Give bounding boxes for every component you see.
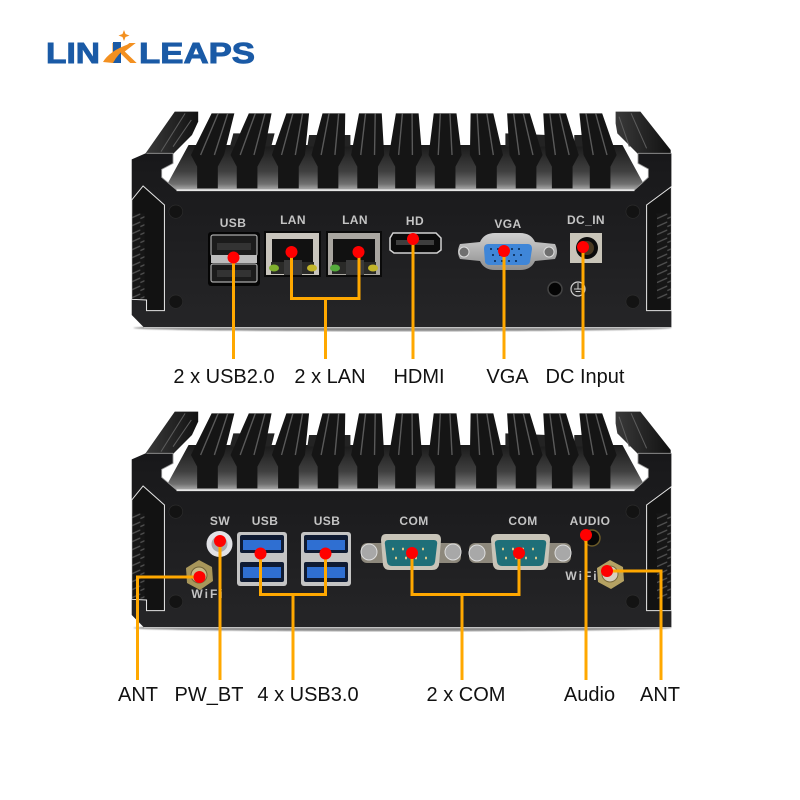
captions: rear ports xyxy=(118,684,680,706)
captions: rear ports: ANT xyxy=(640,684,680,706)
line: VGA xyxy=(502,251,506,359)
port: left antenna xyxy=(186,560,213,590)
line: USB3.0 bracket xyxy=(260,553,326,680)
captions: front ports: VGA xyxy=(486,366,529,388)
port: USB 3.0 stack 2 xyxy=(301,532,351,586)
silk labels, front: LAN xyxy=(280,213,306,227)
logo: LINKLEAPS: LEAPS xyxy=(139,38,255,70)
line: power button xyxy=(218,541,222,680)
captions: rear ports: PW_BT xyxy=(175,684,243,706)
port: LAN 1 xyxy=(264,231,321,277)
line: audio xyxy=(584,535,588,680)
device enclosure, front xyxy=(132,112,671,331)
silk labels, front: DC_IN xyxy=(567,213,605,227)
red markers, rear xyxy=(194,529,613,583)
line: COM bracket xyxy=(412,553,519,680)
port: power button xyxy=(206,531,232,557)
silk labels, rear: SW xyxy=(210,514,230,528)
port: DC input xyxy=(570,233,602,263)
device enclosure, rear xyxy=(132,412,671,631)
silk labels, front: HD xyxy=(406,214,424,228)
captions: rear ports: 2 x COM xyxy=(427,684,505,706)
line: HDMI xyxy=(412,239,414,359)
line: DC input xyxy=(582,247,584,359)
captions: front ports: 2 x LAN xyxy=(294,366,366,388)
red markers, front xyxy=(228,233,589,264)
silk labels, rear: COM xyxy=(399,514,429,528)
callout lines and dots: front xyxy=(228,233,589,359)
silk labels, front: VGA xyxy=(494,217,522,231)
port: USB 2.0 stack xyxy=(208,232,260,286)
silk labels, rear: WiFi xyxy=(191,587,225,601)
captions: front ports: HDMI xyxy=(393,366,445,388)
silk labels, rear: USB xyxy=(314,514,340,528)
captions: front ports xyxy=(173,366,625,388)
port: HDMI xyxy=(390,233,441,253)
port: VGA xyxy=(458,233,557,270)
port: COM 1 xyxy=(361,534,461,570)
line: right antenna xyxy=(607,571,661,680)
captions: rear ports: Audio xyxy=(564,684,615,706)
captions: rear ports: 4 x USB3.0 xyxy=(257,684,359,706)
line: LAN bracket xyxy=(292,252,359,359)
port: audio jack xyxy=(584,530,600,546)
logo: LINKLEAPS: LIN xyxy=(46,38,100,70)
line: left antenna xyxy=(138,577,199,680)
silk labels, rear xyxy=(191,514,610,601)
logo: LINKLEAPS xyxy=(46,30,255,70)
port: COM 2 xyxy=(469,534,571,570)
silk labels, front: USB xyxy=(220,216,246,230)
captions: front ports: DC Input xyxy=(546,366,625,388)
silk labels, front xyxy=(220,213,605,231)
line: USB2.0 xyxy=(232,257,235,359)
logo: LINKLEAPS: K xyxy=(110,38,137,70)
captions: front ports: 2 x USB2.0 xyxy=(173,366,275,388)
callout lines and dots: rear xyxy=(138,529,661,680)
silk labels, rear: WiFi xyxy=(565,569,599,583)
port: LAN 2 xyxy=(326,231,382,277)
panel: rear view device xyxy=(132,412,671,631)
silk labels, rear: AUDIO xyxy=(570,514,610,528)
port: USB 3.0 stack 1 xyxy=(237,532,287,586)
silk labels, front: LAN xyxy=(342,213,368,227)
silk labels, rear: USB xyxy=(252,514,278,528)
small jack and ground mark xyxy=(548,282,585,296)
port: right antenna xyxy=(597,560,624,589)
panel: front view device xyxy=(132,112,671,331)
silk labels, rear: COM xyxy=(508,514,538,528)
captions: rear ports: ANT xyxy=(118,684,158,706)
